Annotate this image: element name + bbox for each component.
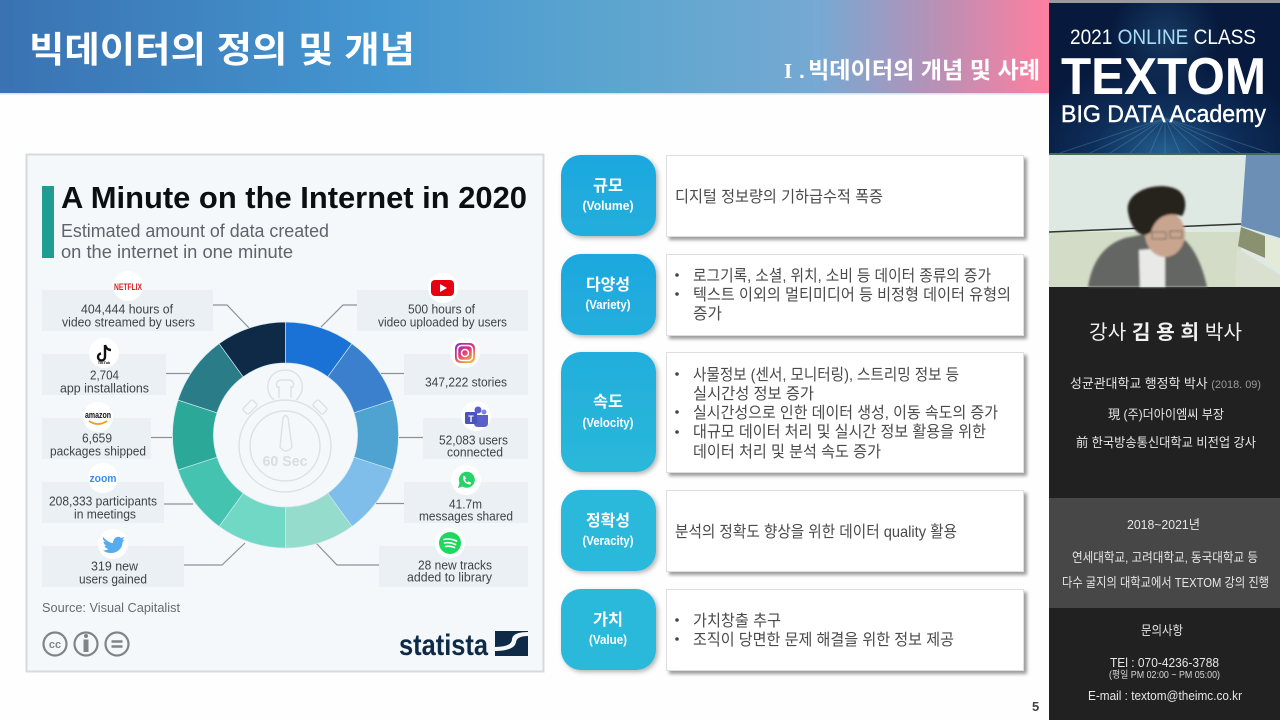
data labels left: 208,333 participants bbox=[49, 494, 157, 508]
contact information: TEl : 070-4236-3788 bbox=[1110, 655, 1219, 670]
icon: Zoom: zoom bbox=[90, 473, 117, 485]
contact information: 문의사항 bbox=[1141, 623, 1183, 638]
icon: YouTube bbox=[428, 273, 458, 303]
page number: 5 bbox=[1032, 699, 1039, 714]
panel: Velocity row bbox=[561, 352, 1024, 472]
badge: 정확성: 정확성 bbox=[586, 512, 630, 530]
data labels left: 6,659 bbox=[82, 430, 112, 446]
text box: Velocity: 대규모 데이터 처리 및 실시간 정보 활용을 위한 bbox=[693, 423, 986, 441]
text box: Velocity bbox=[666, 352, 1024, 472]
text box: Variety: 텍스트 이외의 멀티미디어 등 비정형 데이터 유형의 bbox=[693, 286, 1011, 304]
data labels left: 2,704 bbox=[90, 368, 119, 382]
lecture history panel: 2018~2021년 bbox=[1127, 517, 1200, 532]
icon: WhatsApp bbox=[451, 465, 481, 495]
badge: 규모 bbox=[561, 155, 656, 236]
text box: Velocity: 사물정보 (센서, 모니터링), 스트리밍 정보 등 bbox=[693, 366, 959, 384]
icon: Twitter bbox=[98, 529, 128, 559]
source note: Source: Visual Capitalist bbox=[42, 600, 180, 615]
data labels left: users gained bbox=[79, 572, 147, 586]
icon: Amazon: amazon bbox=[85, 410, 111, 420]
label boxes and connectors bbox=[42, 290, 528, 587]
text box: Velocity: 데이터 처리 및 분석 속도 증가 bbox=[693, 443, 881, 461]
data labels right: 52,083 users bbox=[439, 432, 508, 448]
data labels right bbox=[378, 302, 513, 584]
banner: TEXTOM academy: TEXTOM bbox=[1061, 48, 1266, 106]
text box: Velocity: 실시간성 정보 증가 bbox=[693, 385, 814, 403]
badge: 다양성: (Variety) bbox=[586, 297, 630, 312]
badge: 다양성 bbox=[561, 254, 656, 335]
panel: infographic A Minute on the Internet bbox=[26, 154, 544, 672]
lecturer name: 강사 김 용 희 박사 bbox=[1089, 321, 1242, 344]
text box: Veracity: 분석의 정확도 향상을 위한 데이터 quality 활용 bbox=[675, 523, 957, 541]
data labels right: video uploaded by users bbox=[378, 314, 507, 330]
data labels right: 500 hours of bbox=[408, 302, 475, 316]
infographic title: A Minute on the Internet in 2020 bbox=[61, 180, 527, 215]
slide title: 빅데이터의 정의 및 개념 bbox=[29, 29, 415, 70]
data labels left: 404,444 hours of bbox=[81, 302, 173, 316]
lecturer career: 現 (주)더아이엠씨 부장 bbox=[1108, 407, 1224, 422]
section title: . bbox=[799, 60, 805, 83]
banner: TEXTOM academy bbox=[1049, 0, 1280, 153]
badge: 가치 bbox=[561, 589, 656, 670]
accent bar bbox=[42, 186, 54, 258]
text box: Velocity: 실시간성으로 인한 데이터 생성, 이동 속도의 증가 bbox=[693, 404, 998, 422]
icon: stopwatch 60 Sec bbox=[239, 370, 331, 492]
icon: creative commons licences: cc bbox=[49, 639, 61, 651]
infographic subtitle: on the internet in one minute bbox=[61, 242, 293, 262]
badge: 속도: 속도 bbox=[593, 393, 623, 411]
badge: 속도 bbox=[561, 352, 656, 472]
data labels left: app installations bbox=[60, 380, 149, 396]
contact information bbox=[1088, 623, 1243, 703]
icon: Netflix bbox=[113, 271, 143, 301]
data labels left bbox=[49, 302, 195, 586]
icon: Zoom bbox=[88, 463, 118, 493]
panel: Variety row bbox=[561, 254, 1024, 336]
text box: Variety bbox=[666, 254, 1024, 336]
icon: Microsoft Teams bbox=[461, 401, 491, 431]
text box: Veracity bbox=[666, 490, 1024, 572]
infographic subtitle bbox=[61, 221, 329, 262]
data labels right: 41.7m bbox=[449, 496, 482, 512]
data labels right: messages shared bbox=[419, 508, 513, 524]
banner: TEXTOM academy: BIG DATA Academy bbox=[1061, 101, 1266, 128]
lecture history panel bbox=[1049, 498, 1280, 608]
icon: Spotify bbox=[435, 528, 465, 558]
text box: Volume bbox=[666, 156, 1024, 236]
badge: 다양성: 다양성 bbox=[586, 276, 630, 294]
icon: TikTok bbox=[89, 338, 119, 368]
contact information: E-mail : textom@theimc.co.kr bbox=[1088, 688, 1243, 703]
section title: 빅데이터의 개념 및 사례 bbox=[808, 57, 1040, 83]
data labels right: 28 new tracks bbox=[418, 558, 492, 572]
text box: Value: 조직이 당면한 문제 해결을 위한 정보 제공 bbox=[693, 631, 954, 649]
text box: Value bbox=[666, 590, 1024, 670]
statista logo: statista bbox=[399, 629, 488, 662]
data labels left: in meetings bbox=[74, 506, 136, 522]
icon: Netflix: NETFLIX bbox=[114, 282, 142, 293]
badge: 속도: (Velocity) bbox=[582, 415, 634, 430]
data labels right: 347,222 stories bbox=[425, 374, 507, 390]
text box: Variety: 증가 bbox=[693, 305, 722, 323]
icon: Microsoft Teams: T bbox=[468, 414, 474, 424]
text box: Variety: 로그기록, 소셜, 위치, 소비 등 데이터 종류의 증가 bbox=[693, 267, 991, 285]
icon: TikTok: TikTok bbox=[98, 360, 111, 365]
lecturer career bbox=[1070, 376, 1261, 450]
sidebar bbox=[1049, 0, 1280, 720]
data labels left: video streamed by users bbox=[62, 314, 195, 330]
contact information: (평일 PM 02:00 ~ PM 05:00) bbox=[1109, 669, 1220, 681]
data labels right: added to library bbox=[407, 570, 492, 584]
icon: stopwatch 60 Sec: 60 Sec bbox=[262, 453, 308, 470]
badge: 정확성 bbox=[561, 490, 656, 571]
text box: Value: 가치창출 추구 bbox=[693, 612, 781, 630]
banner: TEXTOM academy: 2021 ONLINE CLASS bbox=[1070, 26, 1256, 49]
data labels left: packages shipped bbox=[50, 444, 146, 458]
lecturer career: 前 한국방송통신대학교 비전업 강사 bbox=[1076, 435, 1256, 450]
donut chart bbox=[172, 322, 399, 548]
panel: Volume row bbox=[561, 155, 1024, 236]
lecturer career: 성균관대학교 행정학 박사 (2018. 09) bbox=[1070, 376, 1261, 391]
text box: Volume: 디지털 정보량의 기하급수적 폭증 bbox=[675, 188, 883, 206]
infographic subtitle: Estimated amount of data created bbox=[61, 221, 329, 241]
header banner bbox=[0, 0, 1049, 94]
icon: Instagram bbox=[450, 338, 480, 368]
panel: Veracity row bbox=[561, 490, 1024, 572]
data labels right: connected bbox=[447, 444, 503, 460]
data labels left: 319 new bbox=[91, 558, 139, 574]
section title: I bbox=[784, 59, 792, 83]
badge: 규모: (Volume) bbox=[582, 198, 634, 213]
lecture history panel: 연세대학교, 고려대학교, 동국대학교 등 bbox=[1072, 550, 1258, 565]
badge: 정확성: (Veracity) bbox=[582, 533, 634, 548]
badge: 가치: (Value) bbox=[589, 632, 627, 647]
panel: Value row bbox=[561, 589, 1024, 670]
icon: Amazon bbox=[83, 402, 113, 432]
lecturer photo bbox=[1049, 153, 1280, 287]
badge: 규모: 규모 bbox=[593, 178, 623, 195]
icon: creative commons licences bbox=[44, 632, 128, 656]
badge: 가치: 가치 bbox=[593, 611, 623, 629]
